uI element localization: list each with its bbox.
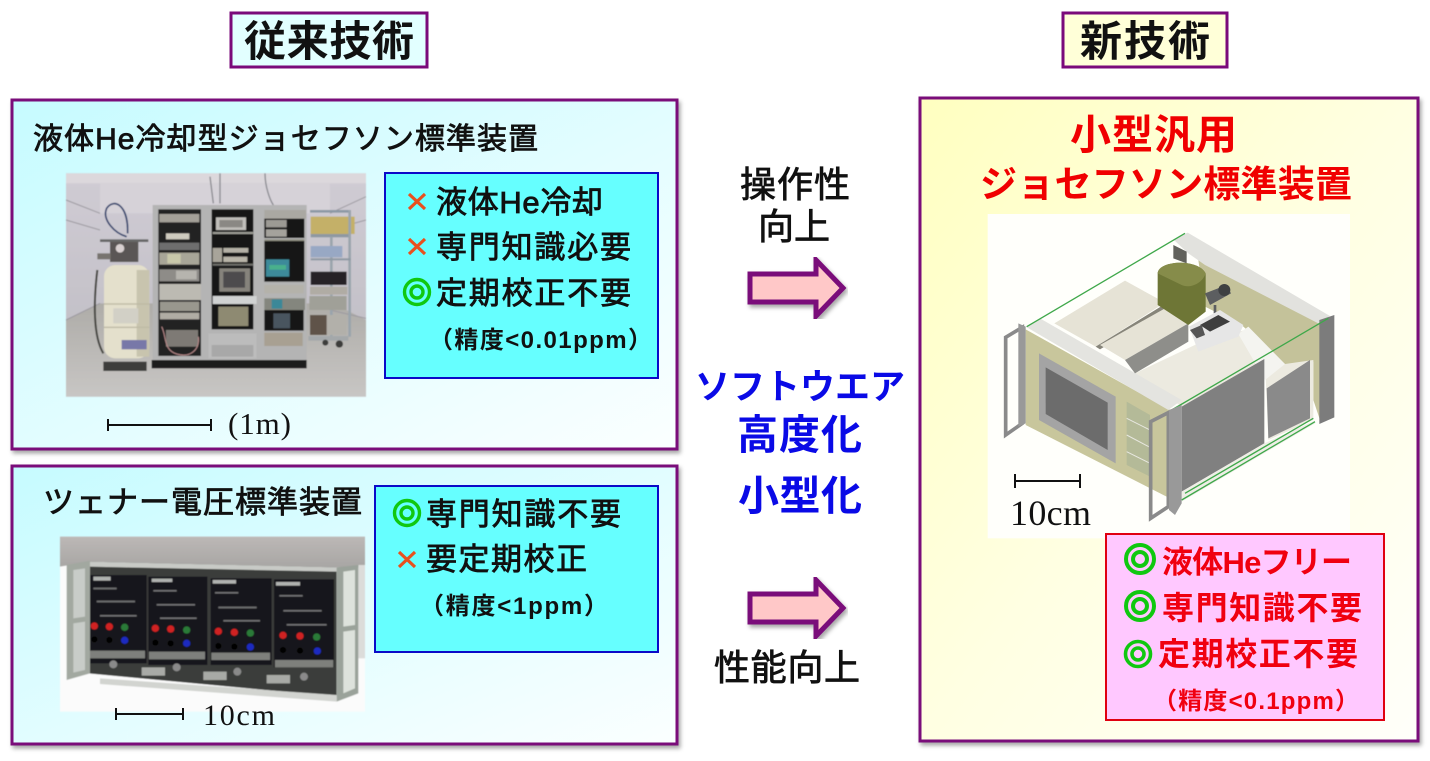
panel heading: ジョセフソン標準装置 — [980, 164, 1352, 205]
arrow: lower — [750, 580, 843, 636]
connector block — [1189, 310, 1243, 352]
screen — [1039, 353, 1116, 463]
PSU blocks — [1054, 281, 1165, 347]
side panel — [1182, 359, 1264, 492]
cross icon — [409, 239, 425, 254]
right handle — [1151, 413, 1168, 518]
dewar — [104, 265, 149, 358]
back wall — [1198, 260, 1320, 420]
heading: conventional technology: 従来技術 — [244, 18, 414, 65]
label: software and miniaturisation — [695, 368, 905, 519]
cylinder — [1158, 263, 1206, 325]
label: software and miniaturisation: 高度化 — [737, 412, 862, 458]
green edges — [1027, 233, 1328, 500]
pros and cons box: 専門知識必要 — [436, 230, 631, 265]
scale bar 1m: (1m) — [228, 406, 291, 441]
benefits box: 液体Heフリー — [1162, 545, 1352, 580]
benefits box: 定期校正不要 — [1158, 636, 1358, 672]
panel heading: 小型汎用 — [1070, 112, 1237, 158]
benefits box — [1106, 534, 1384, 720]
panel heading: ツェナー電圧標準装置 — [43, 485, 362, 520]
double circle icon — [404, 280, 430, 304]
pros and cons box: （精度<1ppm） — [420, 593, 608, 620]
label: software and miniaturisation: ソフトウエア — [695, 368, 905, 407]
label: operability improvement: 向上 — [758, 206, 830, 247]
racks — [153, 205, 307, 362]
3D render of device — [988, 214, 1350, 538]
panel heading — [980, 112, 1352, 205]
pros and cons box: 専門知識不要 — [426, 497, 621, 532]
pros and cons box: 定期校正不要 — [436, 276, 631, 311]
left handle — [1006, 327, 1022, 435]
label: operability improvement: 操作性 — [740, 164, 850, 205]
panel heading: 液体He冷却型ジョセフソン標準装置 — [33, 123, 538, 156]
scale bar 10cm: 10cm — [1010, 493, 1091, 533]
panel: compact Josephson standard — [920, 98, 1418, 741]
double circle icon — [1126, 545, 1154, 573]
panel: Zener voltage standard — [12, 466, 677, 744]
heading: new technology — [1063, 13, 1227, 67]
scale bar 10cm: 10cm — [203, 699, 275, 732]
pros and cons box: （精度<0.01ppm） — [429, 327, 652, 354]
label: software and miniaturisation: 小型化 — [738, 473, 862, 519]
arrow: upper — [750, 260, 843, 316]
photo: liquid He system — [66, 173, 366, 397]
side shelf — [310, 210, 351, 213]
port — [1205, 285, 1231, 305]
deck — [1135, 330, 1313, 440]
photo: Zener standard — [60, 537, 365, 712]
front face — [1026, 329, 1170, 498]
heading: new technology: 新技術 — [1080, 18, 1210, 65]
benefits box: （精度<0.1ppm） — [1153, 688, 1359, 715]
pros and cons box — [385, 173, 658, 378]
buttons — [1127, 402, 1150, 477]
pros and cons box — [375, 486, 658, 652]
cross icon — [399, 552, 415, 567]
label: performance improvement: 性能向上 — [714, 647, 860, 688]
scale bar 10cm — [116, 699, 275, 732]
double circle icon — [1126, 592, 1154, 620]
double circle icon — [394, 500, 420, 526]
benefits box: 専門知識不要 — [1162, 590, 1362, 626]
double circle icon — [1126, 642, 1150, 666]
cross icon — [409, 194, 425, 209]
label: operability improvement — [740, 164, 850, 247]
pros and cons box: 要定期校正 — [426, 542, 587, 577]
scale bar 10cm — [1010, 474, 1091, 533]
scale bar 1m — [108, 406, 291, 441]
pros and cons box: 液体He冷却 — [436, 185, 603, 220]
panel: liquid He cooled Josephson standard — [12, 100, 677, 449]
